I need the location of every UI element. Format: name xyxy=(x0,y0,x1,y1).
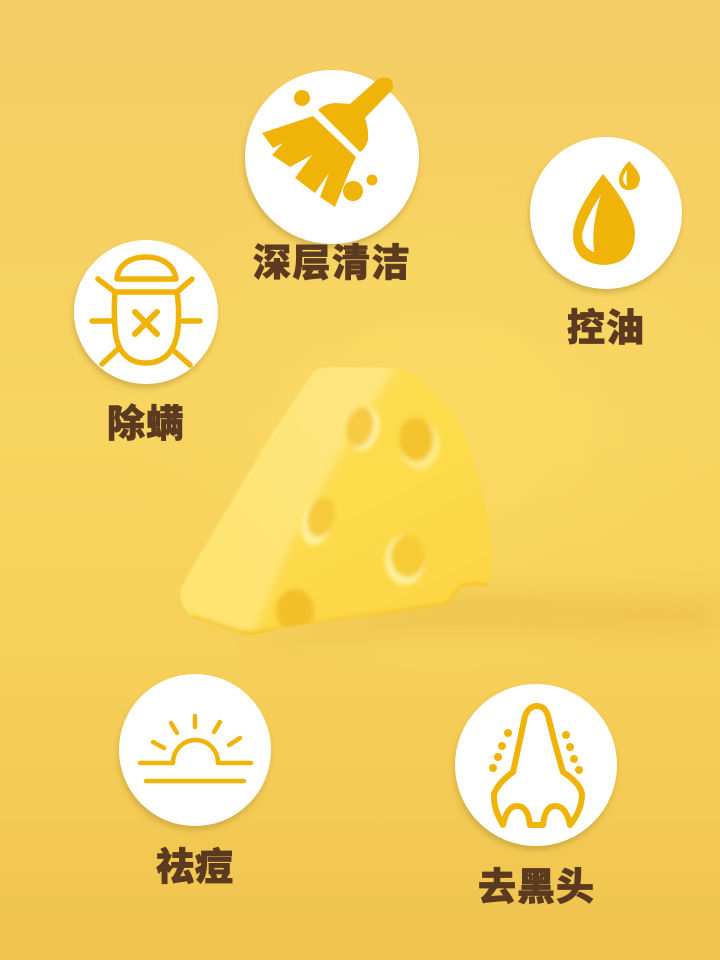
cheese wedge xyxy=(180,366,492,636)
cheese lit side face xyxy=(170,355,400,640)
cheese holes xyxy=(276,404,440,633)
feature: oil control xyxy=(530,137,682,350)
icon: bug with cross xyxy=(74,240,218,384)
cheese bottom edge xyxy=(190,585,490,634)
icon: nose xyxy=(455,684,617,846)
icon: oil drops xyxy=(530,137,682,289)
feature: mite removal xyxy=(74,240,218,446)
label: mite removal: 除螨 xyxy=(107,403,185,446)
cheese photo xyxy=(180,366,712,636)
label: acne removal: 祛痘 xyxy=(156,847,234,889)
icon: broom xyxy=(245,70,419,244)
cheese cast shadow xyxy=(250,592,720,642)
label: oil control: 控油 xyxy=(567,308,645,350)
cheese front face xyxy=(256,368,492,631)
feature: acne removal xyxy=(119,674,271,889)
feature: blackhead removal xyxy=(455,684,617,909)
label: blackhead removal: 去黑头 xyxy=(478,867,595,909)
label: deep clean: 深层清洁 xyxy=(253,243,411,285)
feature: deep clean xyxy=(245,70,419,285)
icon: rising sun xyxy=(119,674,271,826)
